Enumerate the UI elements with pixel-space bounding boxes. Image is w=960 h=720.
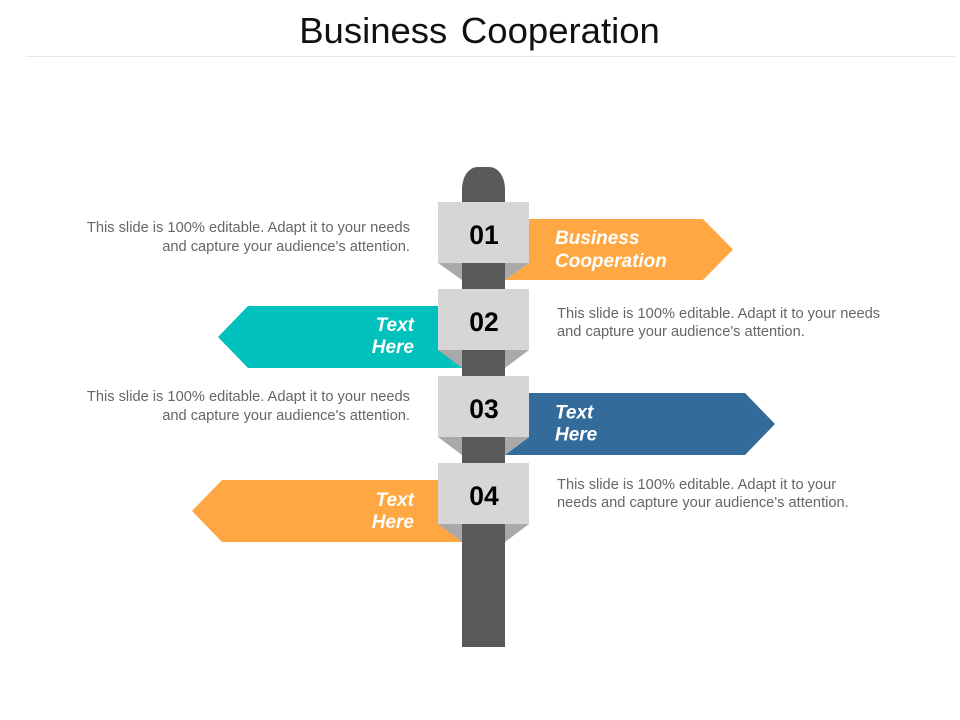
text block 02: and capture your audience's attention.: [557, 324, 805, 340]
label: Text Here 04: Here: [372, 512, 414, 533]
arrow: 04 orange: [192, 480, 462, 542]
label: Text Here 02: Here: [372, 337, 414, 358]
arrow: 02 teal: [218, 306, 462, 368]
text block 03: This slide is 100% editable. Adapt it to your needs: [87, 389, 410, 405]
signpost marker 01: 01: [469, 220, 499, 250]
text block 03: and capture your audience's attention.: [162, 408, 410, 424]
arrow: 01 orange: [505, 219, 733, 280]
text block 04: This slide is 100% editable. Adapt it to your: [557, 477, 836, 493]
label: Text Here 04: Text: [376, 490, 414, 511]
label: Text Here 03: Text: [555, 402, 593, 424]
signpost marker 01: [438, 202, 529, 280]
signpost marker 03: [438, 376, 529, 455]
label: Business Cooperation: Business: [555, 228, 639, 249]
text block 02: This slide is 100% editable. Adapt it to your needs: [557, 306, 880, 322]
signpost marker 04: 04: [469, 481, 499, 511]
signpost marker 02: 02: [469, 307, 499, 337]
label: Business Cooperation: Cooperation: [555, 251, 667, 272]
text block 04: needs and capture your audience's attention.: [557, 495, 849, 511]
label: Text Here 03: Here: [555, 424, 598, 446]
text block 01: This slide is 100% editable. Adapt it to your needs: [87, 220, 410, 236]
signpost marker 02: [438, 289, 529, 368]
label: Text Here 02: Text: [376, 315, 414, 336]
arrow: 03 blue: [505, 393, 775, 455]
signpost pole: [462, 167, 505, 647]
signpost marker 03: 03: [469, 394, 499, 424]
signpost marker 04: [438, 463, 529, 542]
text block 01: and capture your audience's attention.: [162, 239, 410, 255]
title: Business Cooperation: [299, 10, 660, 51]
